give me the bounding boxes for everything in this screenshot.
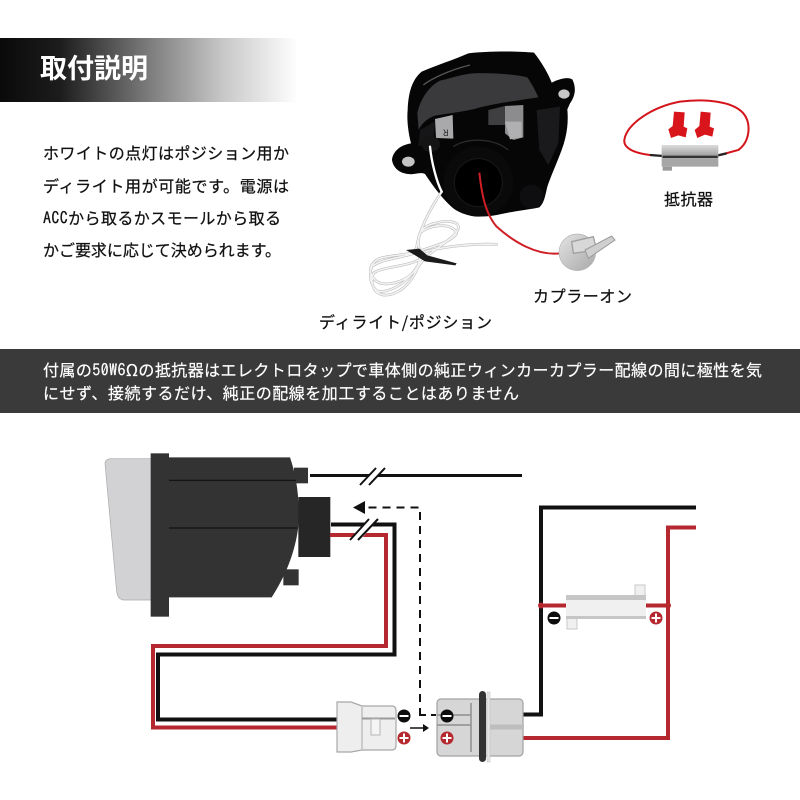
wire break mark lower xyxy=(350,519,378,540)
top black wire xyxy=(310,474,522,477)
minus badge at resistor xyxy=(548,612,560,624)
dark note banner xyxy=(0,349,800,413)
dashed return arrow xyxy=(353,501,440,715)
white wire xyxy=(370,147,497,295)
wire break mark top xyxy=(360,468,385,485)
right black wire xyxy=(523,508,696,714)
product photo: lamp with wires xyxy=(370,51,615,295)
description text block xyxy=(43,140,289,261)
label: resistor: 抵抗器 xyxy=(664,186,713,210)
dark note banner: にせず、接続するだけ、純正の配線を加工することはありません xyxy=(43,380,519,404)
dark note banner: 付属の50W6Ωの抵抗器はエレクトロタップで車体側の純正ウィンカーカプラー配線の間に極性を気 xyxy=(43,357,762,381)
resistor connection red wire xyxy=(538,602,671,608)
resistor in diagram xyxy=(566,585,646,629)
red wire xyxy=(479,173,560,254)
bulb plug xyxy=(337,702,396,752)
right red wire xyxy=(523,528,696,738)
description text block: ディライト用が可能です。電源は xyxy=(43,173,289,197)
socket xyxy=(437,691,524,762)
cable tie xyxy=(406,249,457,265)
minus badge socket xyxy=(440,710,454,722)
plus badge plug xyxy=(398,732,410,744)
black wire loop xyxy=(158,524,394,720)
label: daylight / position: ディライト/ポジション xyxy=(319,309,492,333)
lamp housing: R xyxy=(443,126,449,138)
red wire loop xyxy=(153,535,386,728)
description text block: ACCから取るかスモールから取る xyxy=(43,205,281,229)
lamp side view xyxy=(105,453,330,617)
product photo: resistor kit xyxy=(624,100,749,171)
wiring diagram xyxy=(105,453,696,762)
bulb base xyxy=(559,234,615,271)
insert arrow xyxy=(410,724,429,732)
label: coupler on: カプラーオン xyxy=(533,283,632,307)
description text block: ホワイトの点灯はポジション用か xyxy=(43,140,289,164)
description text block: かご要求に応じて決められます。 xyxy=(43,237,281,261)
resistor wire loop xyxy=(624,100,749,155)
heading band xyxy=(0,38,298,102)
red wire taps xyxy=(668,112,714,138)
plus badge at resistor xyxy=(650,612,662,624)
minus badge plug xyxy=(398,710,410,722)
resistor body xyxy=(662,145,718,171)
heading band: 取付説明 xyxy=(40,47,148,86)
lamp housing xyxy=(392,51,575,217)
plus badge socket xyxy=(440,732,454,744)
